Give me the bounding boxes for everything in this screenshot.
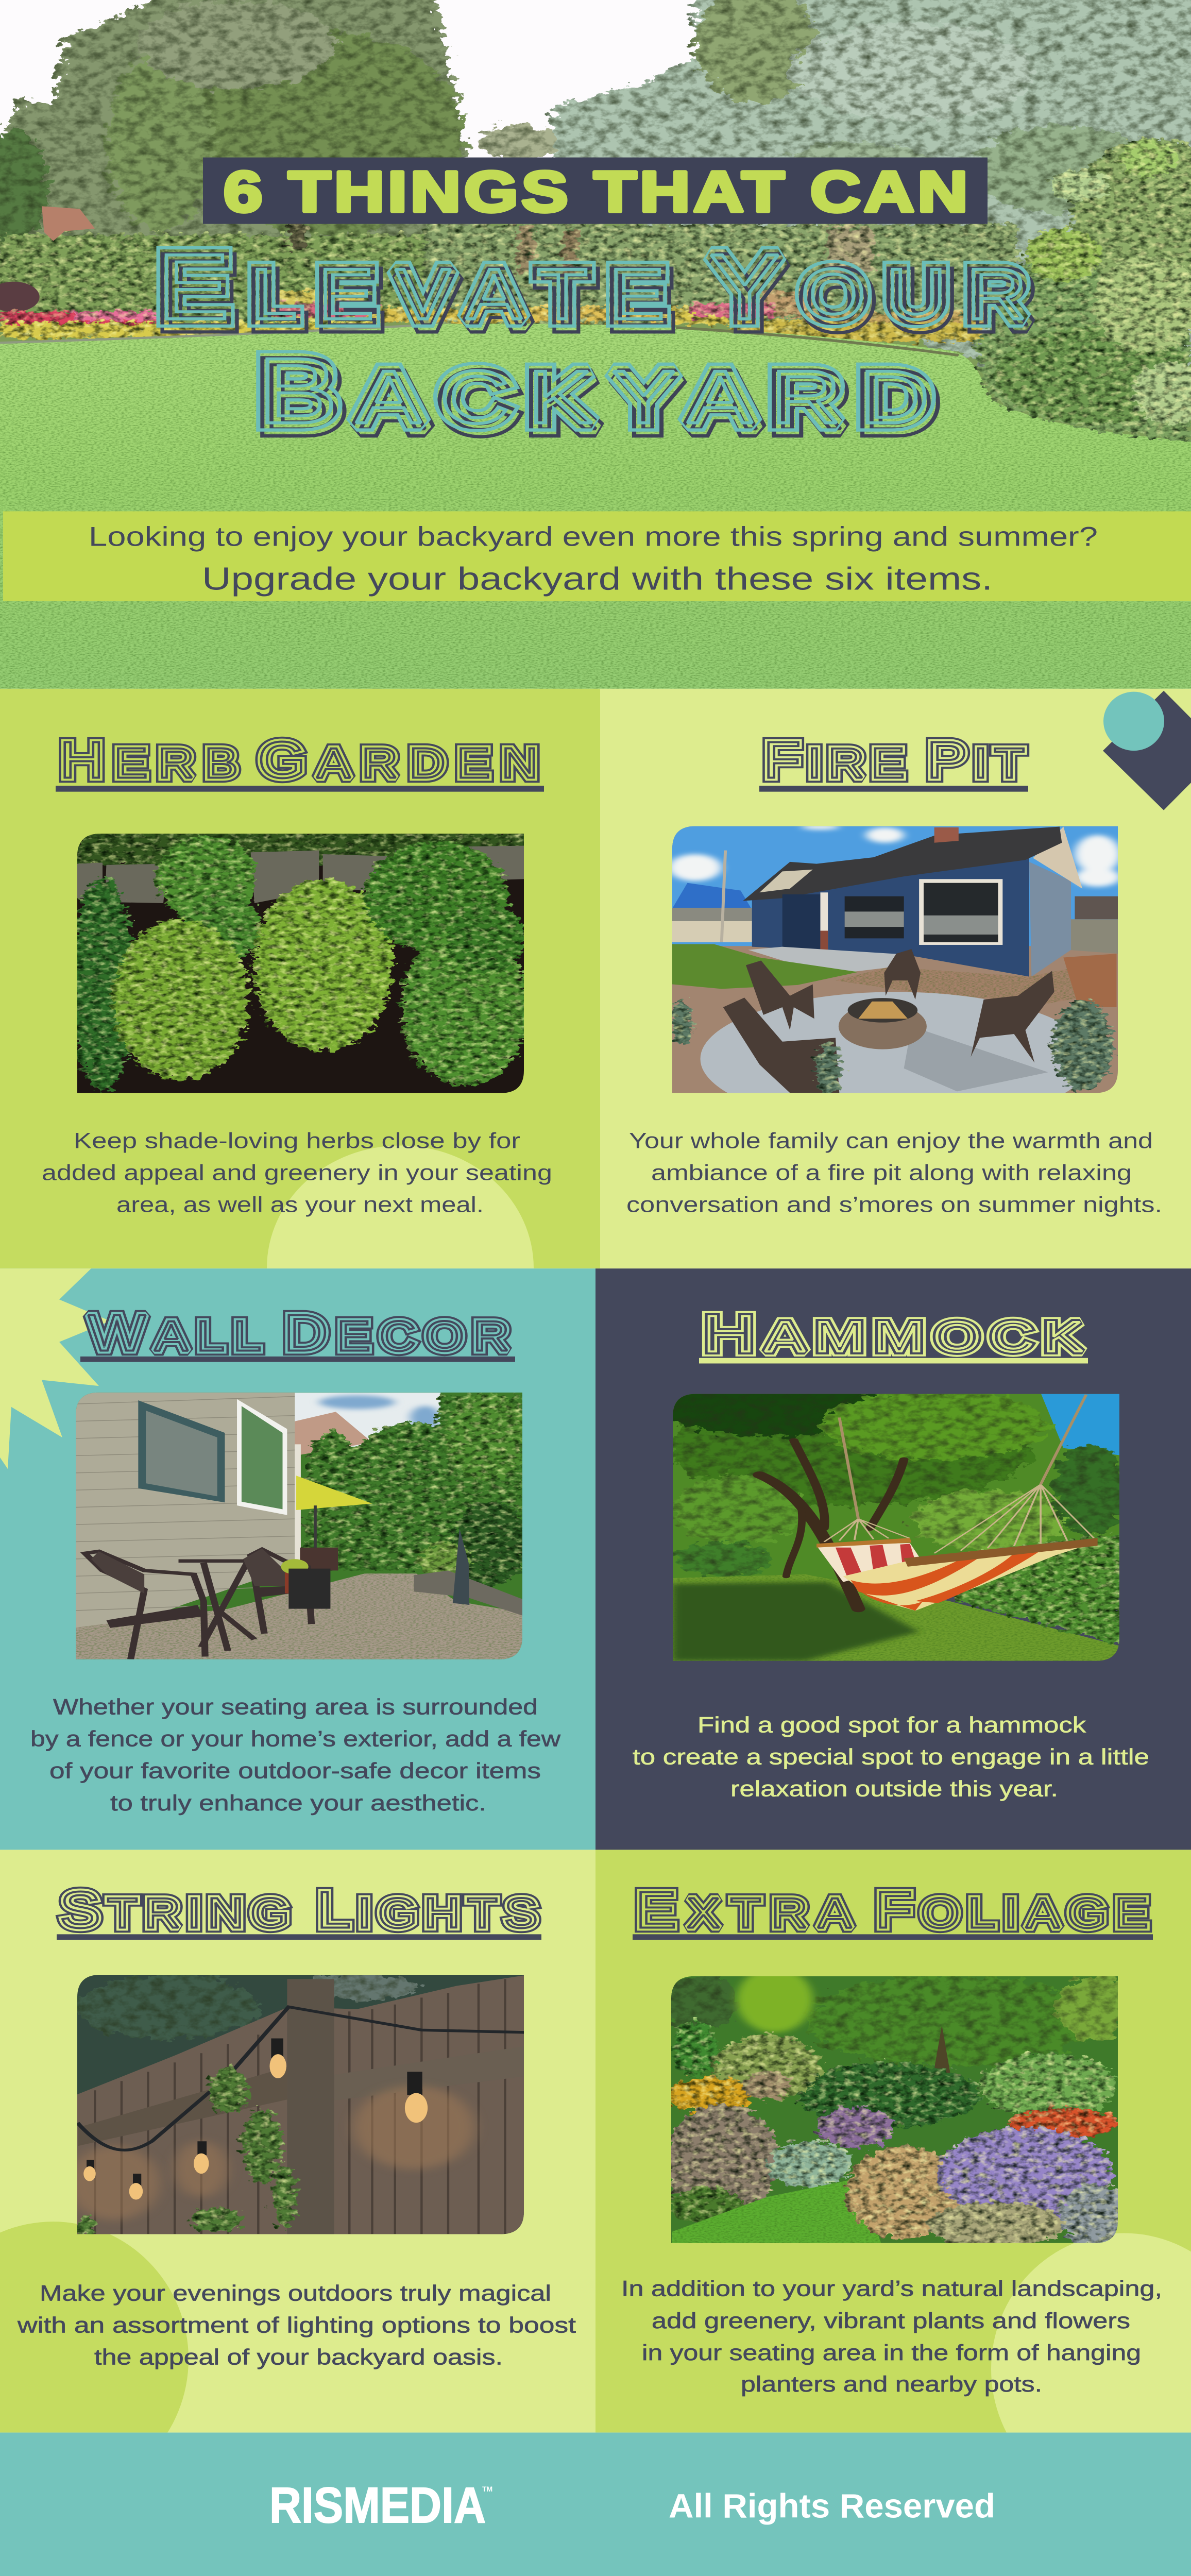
text: hammock description: Find a good spot for a hammock (697, 1713, 1086, 1737)
heading: Herb Garden (56, 732, 544, 792)
decoration: starburst (0, 1268, 110, 1469)
photo: patio with wall decor (72, 1391, 528, 1663)
heading: Fire Pit (759, 732, 1028, 792)
heading: Herb Garden: HERB (60, 732, 238, 789)
text: fire pit description: ambiance of a fire pit along with relaxing (651, 1161, 1132, 1185)
heading: Fire Pit: PIT (927, 732, 1025, 789)
panel: extra foliage (596, 1850, 1191, 2505)
heading: Herb Garden: HERB (60, 732, 238, 789)
text: wall decor description: to truly enhance your aesthetic. (110, 1791, 486, 1816)
text: herb garden description: Keep shade-loving herbs close by for (74, 1129, 520, 1153)
panel: string lights (0, 1850, 596, 2497)
heading: Extra Foliage: FOLIAGE (875, 1882, 1148, 1939)
text: extra foliage description: add greenery, vibrant plants and flowers (652, 2309, 1130, 2333)
photo: fire pit patio (669, 824, 1124, 1126)
photo: flower garden path (661, 1968, 1132, 2248)
heading: Extra Foliage: FOLIAGE (875, 1882, 1148, 1939)
text: wall decor description (30, 1695, 561, 1816)
heading: Extra Foliage: FOLIAGE (875, 1882, 1148, 1939)
heading: Hammock: HAMMOCK (703, 1304, 1083, 1363)
title: Elevate Your Backyard (striped retro lettering) (156, 246, 1035, 438)
heading: String Lights: LIGHTS (317, 1882, 538, 1939)
text: wall decor description: of your favorite outdoor-safe decor items (49, 1759, 541, 1784)
heading: Fire Pit: PIT (927, 732, 1025, 789)
text: string lights description: Make your evenings outdoors truly magical (40, 2281, 551, 2306)
text: fire pit description (626, 1129, 1162, 1217)
heading: String Lights: STRING (60, 1882, 290, 1939)
intro strip (3, 511, 1191, 601)
heading: Wall Decor: WALL (88, 1304, 261, 1362)
heading: Herb Garden: HERB (60, 732, 238, 789)
heading: Wall Decor: DECOR (284, 1304, 509, 1362)
text: hammock description: relaxation outside this year. (730, 1777, 1058, 1801)
banner photo: garden lawn and trees (0, 0, 1191, 689)
intro strip: Upgrade your backyard with these six items. (202, 562, 993, 597)
heading: Wall Decor (80, 1304, 515, 1362)
heading: Fire Pit: FIRE (763, 732, 905, 789)
intro strip: Looking to enjoy your backyard even more this spring and summer? (89, 522, 1098, 552)
heading: String Lights: LIGHTS (317, 1882, 538, 1939)
heading: Extra Foliage (633, 1882, 1153, 1940)
text: extra foliage description: in your seating area in the form of hanging (642, 2341, 1141, 2365)
heading: Herb Garden: G ARDEN (258, 732, 538, 789)
text: hammock description: to create a special spot to engage in a little (633, 1745, 1149, 1769)
heading: String Lights: STRING (60, 1882, 290, 1939)
footer (0, 2433, 1191, 2576)
heading: String Lights: LIGHTS (317, 1882, 538, 1939)
heading: Wall Decor: DECOR (284, 1304, 509, 1362)
logo: RISMedia: RISMEDIA (269, 2478, 486, 2533)
text: fire pit description: Your whole family can enjoy the warmth and (629, 1129, 1153, 1153)
decoration: dark diamond and teal circle (1103, 691, 1191, 810)
heading: Wall Decor: DECOR (284, 1304, 509, 1362)
photo: basil plants (71, 831, 532, 1099)
panel: fire pit (600, 689, 1191, 1268)
heading: String Lights (57, 1882, 541, 1940)
text: herb garden description: area, as well as your next meal. (116, 1193, 484, 1217)
heading: String Lights: STRING (60, 1882, 290, 1939)
heading: Hammock: HAMMOCK (703, 1304, 1083, 1363)
heading: Hammock: HAMMOCK (703, 1304, 1083, 1363)
heading: Fire Pit: FIRE (763, 732, 905, 789)
text: string lights description: the appeal of your backyard oasis. (94, 2345, 503, 2369)
text: extra foliage description: In addition to your yard’s natural landscaping, (621, 2277, 1162, 2301)
heading: Herb Garden: G ARDEN (258, 732, 538, 789)
heading: Extra Foliage: EXTRA (636, 1882, 852, 1939)
heading: Wall Decor: WALL (88, 1304, 261, 1362)
text: wall decor description: by a fence or your home’s exterior, add a few (30, 1727, 561, 1751)
logo: RISMedia: TM (482, 2485, 492, 2493)
text: string lights description (17, 2281, 576, 2369)
text: extra foliage description (621, 2277, 1162, 2397)
text: all rights reserved: All Rights Reserved (669, 2487, 995, 2525)
text: wall decor description: Whether your seating area is surrounded (53, 1695, 538, 1719)
photo: hammock under trees (661, 1383, 1128, 1663)
heading: Extra Foliage: EXTRA (636, 1882, 852, 1939)
heading: Extra Foliage: EXTRA (636, 1882, 852, 1939)
panel: hammock (596, 1268, 1191, 1850)
text: extra foliage description: planters and nearby pots. (741, 2372, 1042, 2397)
heading: Fire Pit: FIRE (763, 732, 905, 789)
text: herb garden description: added appeal and greenery in your seating (42, 1161, 552, 1185)
text: herb garden description (42, 1129, 552, 1217)
text: string lights description: with an assortment of lighting options to boost (17, 2313, 576, 2337)
text: hammock description (633, 1713, 1149, 1801)
panel: wall decor (0, 1268, 596, 1850)
title banner: 6 things that can: 6 THINGS THAT CAN (224, 160, 968, 224)
text: fire pit description: conversation and s’mores on summer nights. (626, 1193, 1162, 1217)
heading: Herb Garden: G ARDEN (258, 732, 538, 789)
heading: Wall Decor: WALL (88, 1304, 261, 1362)
heading: Fire Pit: PIT (927, 732, 1025, 789)
photo: string lights on fence (69, 1972, 528, 2239)
panel: herb garden (0, 688, 600, 1268)
